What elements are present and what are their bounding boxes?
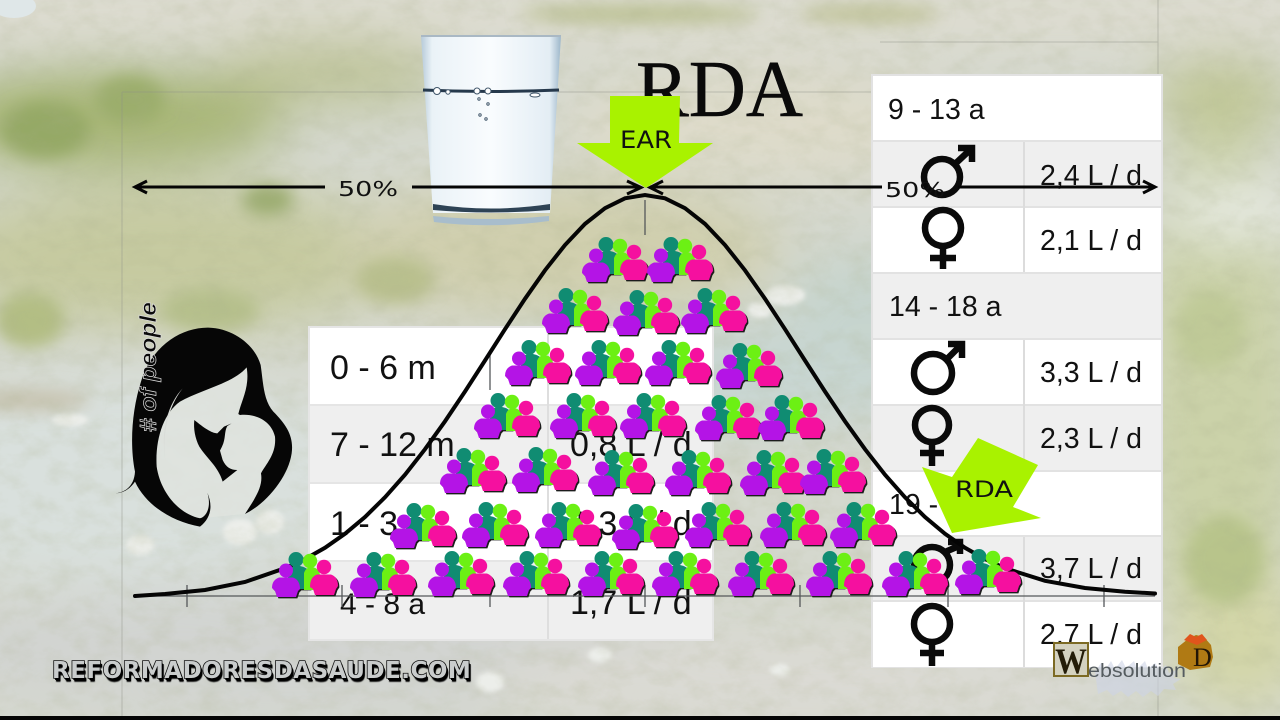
title: RDA: RDA (636, 46, 803, 134)
right table: water intake by age and sex: 2,1 L / d (1040, 225, 1142, 257)
right table: water intake by age and sex: 3,7 L / d (1040, 553, 1142, 585)
right table: water intake by age and sex: 2,4 L / d (1040, 160, 1142, 192)
people groups in the distribution (272, 237, 1022, 598)
arrow: 50% left of the EAR: 50% (338, 177, 398, 201)
icon: glass of water (421, 36, 561, 225)
right table: water intake by age and sex: 3,3 L / d (1040, 357, 1142, 389)
chart: normal distribution curve (135, 195, 1155, 596)
arrow: 50% right of the EAR (650, 178, 1155, 202)
logo: Websolution (1054, 634, 1213, 697)
right table: water intake by age and sex: 2,7 L / d (1040, 619, 1142, 651)
left table: water intake, infants and children: 0 - 6 m (330, 349, 436, 387)
arrow: RDA marker (922, 438, 1041, 533)
right table: water intake by age and sex: 19 - 30 a (889, 489, 1002, 521)
right table: water intake by age and sex (871, 74, 1163, 668)
right table: water intake by age and sex: 14 - 18 a (889, 291, 1002, 323)
logo: Websolution: D (1193, 643, 1212, 672)
left table: water intake, infants and children: 7 - 12 m (330, 426, 455, 464)
axis label: # of people: # of people (135, 302, 161, 432)
arrow: EAR marker (577, 96, 713, 188)
left table: water intake, infants and children: 4 - 8 a (340, 588, 425, 621)
arrow: RDA marker: RDA (955, 478, 1013, 503)
logo: Websolution: ebsolution (1088, 661, 1186, 682)
left table: water intake, infants and children: 1,3 L / d (570, 505, 692, 543)
left table: water intake, infants and children: 1 - 3 a (330, 505, 426, 543)
left table: water intake, infants and children: 0,8 L / d (570, 426, 692, 464)
chart axis with tick marks (135, 200, 1155, 607)
logo: Websolution: W (1055, 641, 1087, 681)
right table: water intake by age and sex: 9 - 13 a (888, 94, 985, 126)
arrow: 50% left of the EAR (135, 177, 641, 201)
right table: water intake by age and sex: 2,3 L / d (1040, 423, 1142, 455)
website brand text: REFORMADORESDASAUDE.COM (52, 658, 471, 684)
left table: water intake, infants and children: 1,7 L / d (570, 584, 692, 622)
arrow: 50% right of the EAR: 50% (885, 178, 945, 202)
icon: mother and baby silhouette (116, 328, 292, 527)
left table: water intake, infants and children (308, 326, 714, 641)
icons: male and female symbols (914, 148, 972, 666)
arrow: EAR marker: EAR (620, 126, 672, 154)
